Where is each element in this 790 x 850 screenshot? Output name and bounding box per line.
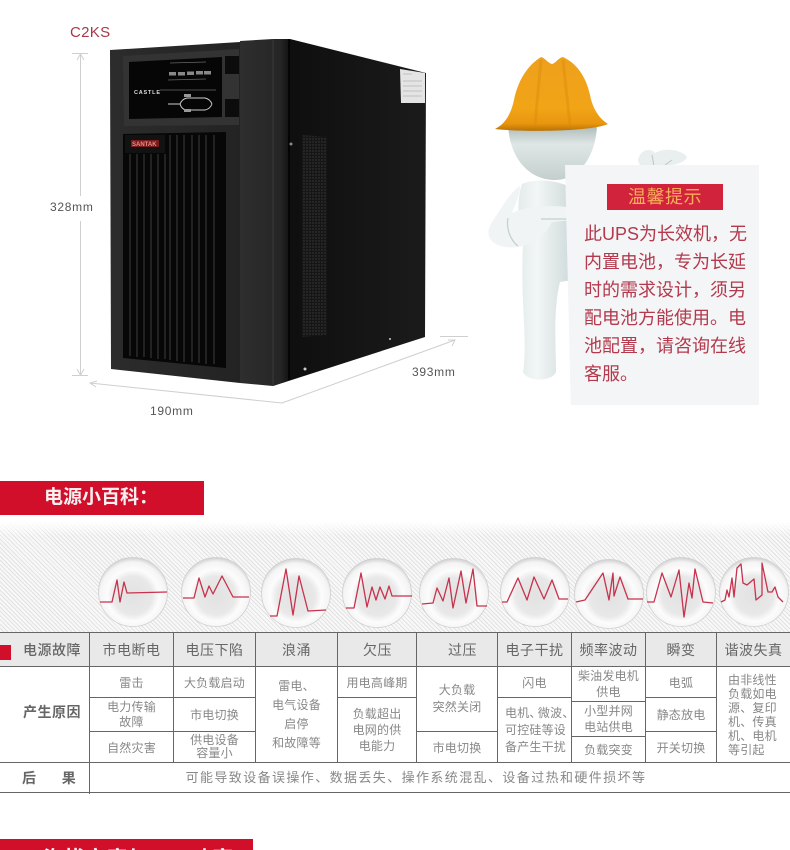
cause: surge causes: [272, 678, 321, 750]
header: transient: 瞬变: [666, 642, 696, 658]
dimension label: depth: 393mm: [412, 365, 456, 379]
upper fingers: [638, 150, 687, 169]
notice sign: [565, 165, 759, 405]
cause: natural disaster: 自然灾害: [107, 740, 156, 754]
cause: lightning: 雷击: [119, 676, 144, 690]
notice body text: 客服。: [584, 364, 638, 384]
notice body text: 此UPS为长效机，无: [584, 224, 747, 244]
notice title: [607, 184, 723, 210]
circles: [98, 558, 788, 628]
notice body text: 池配置，请咨询在线: [584, 336, 746, 356]
cause: small capacity: [190, 733, 239, 760]
red marker: [0, 645, 11, 660]
notice body text: 内置电池，专为长延: [584, 252, 746, 272]
cause: equipment interference: 电机、微波、: [505, 706, 571, 720]
cause: small capacity: 容量小: [196, 746, 233, 760]
mascot: worker in hard hat: [488, 57, 687, 380]
row label: consequences: [22, 770, 76, 786]
dimension label: width: 190mm: [150, 404, 194, 418]
notice body text: 配电池方能使用。电: [584, 308, 746, 328]
cause: diesel generator: 供电: [596, 685, 621, 699]
cause: equipment interference: 可控硅等设: [505, 722, 566, 736]
cause: overload: 电网的供: [353, 723, 401, 737]
notice body text: 时的需求设计，须另: [584, 280, 746, 300]
cause: transmission fault: 电力传输: [107, 700, 156, 714]
cause: static: 静态放电: [657, 708, 705, 722]
cause: lightning flash: 闪电: [522, 676, 547, 690]
row label: consequences: 后: [22, 770, 36, 786]
control panel: CASTLE: [134, 90, 161, 96]
cause: nonlinear load: 机、电机: [728, 728, 777, 742]
cause: arc: 电弧: [669, 676, 693, 690]
control panel: [123, 49, 239, 126]
header: sag: 电压下陷: [186, 642, 244, 658]
cause: nonlinear load: 负载如电: [728, 686, 777, 700]
cause: transmission fault: [107, 700, 156, 728]
cause: nonlinear load: 源、复印: [728, 700, 777, 714]
cause: overload: 负载超出: [353, 707, 401, 721]
cause: small grid: 电站供电: [584, 720, 633, 734]
header: fault type: 电源故障: [23, 642, 81, 658]
header: surge: 浪涌: [282, 642, 311, 658]
waveforms: [100, 563, 783, 617]
header: frequency: 频率波动: [580, 642, 638, 658]
cause: mains switch: 市电切换: [433, 740, 481, 754]
dimension label: height: 328mm: [50, 200, 94, 214]
power fault table: [0, 632, 790, 794]
section heading: altitude and UPS power: [0, 839, 253, 850]
cause: mains switch: 市电切换: [190, 708, 239, 722]
notice body text: [584, 224, 746, 382]
cause: surge causes: 启停: [284, 716, 309, 730]
row label: consequences: 果: [62, 770, 76, 786]
cause: surge causes: 雷电、: [278, 678, 315, 692]
cause: diesel generator: 柴油发电机: [578, 669, 639, 683]
table header row: [0, 632, 790, 666]
notice title: 温馨提示: [628, 187, 702, 207]
cause: diesel generator: [578, 669, 639, 699]
cause: load change: 负载突变: [584, 743, 633, 757]
section heading: power encyclopedia: 电源小百科：: [44, 487, 158, 508]
body and leg: [518, 181, 572, 380]
cause: overload: [353, 707, 401, 753]
cause: load shutdown: [433, 683, 481, 714]
cause: nonlinear load: 等引起: [728, 742, 765, 756]
cause: peak usage: 用电高峰期: [346, 676, 408, 690]
cause: small capacity: 供电设备: [190, 733, 239, 747]
row label: causes: 产生原因: [23, 704, 81, 720]
cause: load shutdown: 突然关闭: [433, 700, 481, 714]
header: harmonic: 谐波失真: [724, 642, 782, 658]
cause: load shutdown: 大负载: [439, 683, 475, 697]
cause: equipment interference: 备产生干扰: [505, 740, 566, 754]
cause: nonlinear load: 机、传真: [728, 714, 777, 728]
cause: surge causes: 电气设备: [272, 698, 321, 712]
head: [508, 125, 597, 180]
cause: surge causes: 和故障等: [272, 736, 321, 750]
arm and hand holding sign: [488, 186, 577, 247]
header: overvoltage: 过压: [448, 642, 477, 658]
cause: small grid: 小型并网: [584, 704, 633, 718]
cabinet body: [110, 39, 426, 386]
cause: transmission fault: 故障: [119, 714, 144, 728]
cause: small grid: [584, 704, 633, 734]
hard hat: [495, 57, 608, 131]
product image: UPS tower with dimension lines: [72, 39, 468, 404]
front grille and logo: [123, 132, 226, 368]
header: undervoltage: 欠压: [363, 642, 392, 658]
consequences text: 可能导致设备误操作、数据丢失、操作系统混乱、设备过热和硬件损坏等: [186, 770, 646, 785]
cause: nonlinear load: 由非线性: [728, 672, 777, 686]
header: outage: 市电断电: [102, 642, 160, 658]
product title: C2KS: C2KS: [70, 24, 110, 41]
front grille and logo: SANTAK: [132, 142, 157, 148]
rating label: [400, 69, 425, 103]
cause: large load start: 大负载启动: [184, 676, 245, 690]
cause: equipment interference: [505, 706, 571, 754]
cause: switching: 开关切换: [657, 740, 705, 754]
hatched background with waveform icons: [0, 522, 790, 633]
side vent: [302, 135, 327, 337]
cause: overload: 电能力: [359, 739, 395, 753]
section heading: power encyclopedia: [0, 481, 204, 515]
header: interference: 电子干扰: [506, 642, 564, 658]
cause: nonlinear load: [728, 672, 777, 756]
dimension lines: [72, 54, 468, 403]
